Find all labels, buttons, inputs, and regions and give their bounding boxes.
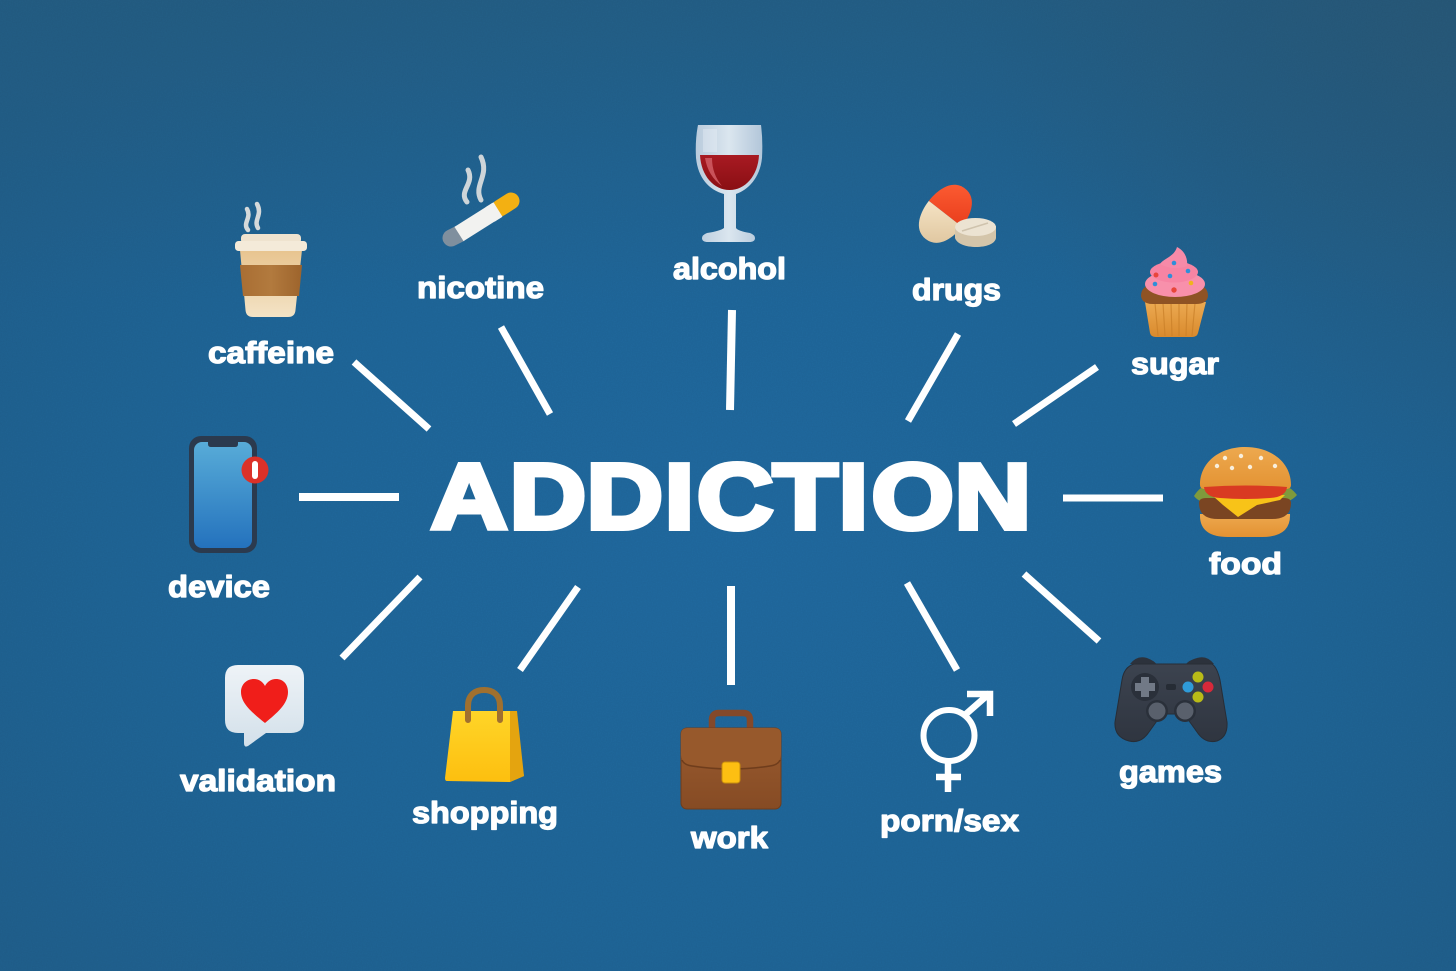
- spoke: alcohol: [730, 310, 732, 410]
- spoke: games: [1024, 574, 1099, 641]
- label: drugs: drugs: [912, 272, 1001, 307]
- spoke: device: [299, 493, 399, 501]
- label: sugar: sugar: [1131, 346, 1219, 381]
- label: nicotine: nicotine: [417, 270, 544, 305]
- icon: wine glass: [696, 125, 762, 242]
- label: food: food: [1209, 546, 1282, 581]
- icon: speech bubble with heart: [225, 665, 304, 747]
- spoke: sugar: [1014, 367, 1097, 424]
- spoke: caffeine: [354, 362, 429, 429]
- icon: burger: [1194, 447, 1297, 537]
- icon: cupcake: [1141, 247, 1208, 337]
- spoke: work: [727, 586, 735, 685]
- spoke: porn/sex: [907, 583, 957, 670]
- icon: cigarette: [451, 157, 511, 238]
- spoke: food: [1063, 494, 1163, 502]
- label: validation: validation: [180, 763, 336, 798]
- label: caffeine: caffeine: [208, 335, 334, 370]
- label: device: device: [168, 569, 270, 604]
- icon: gender symbol: [924, 693, 990, 792]
- icon: smartphone with notification: [189, 436, 268, 553]
- label: games: games: [1119, 754, 1222, 789]
- icon: shopping bag: [445, 690, 524, 782]
- icon: coffee cup: [235, 204, 307, 317]
- spoke: shopping: [520, 587, 578, 670]
- icon: briefcase: [681, 713, 781, 809]
- label: work: work: [690, 820, 769, 855]
- icon: pills: [909, 176, 996, 252]
- label: porn/sex: porn/sex: [880, 803, 1020, 838]
- title: ADDICTION: ADDICTION: [431, 445, 1031, 549]
- spoke: drugs: [908, 334, 958, 421]
- spoke: validation: [342, 577, 420, 658]
- spoke: nicotine: [501, 327, 550, 414]
- label: alcohol: alcohol: [673, 251, 786, 286]
- label: shopping: shopping: [412, 795, 558, 830]
- icon: game controller: [1115, 657, 1227, 742]
